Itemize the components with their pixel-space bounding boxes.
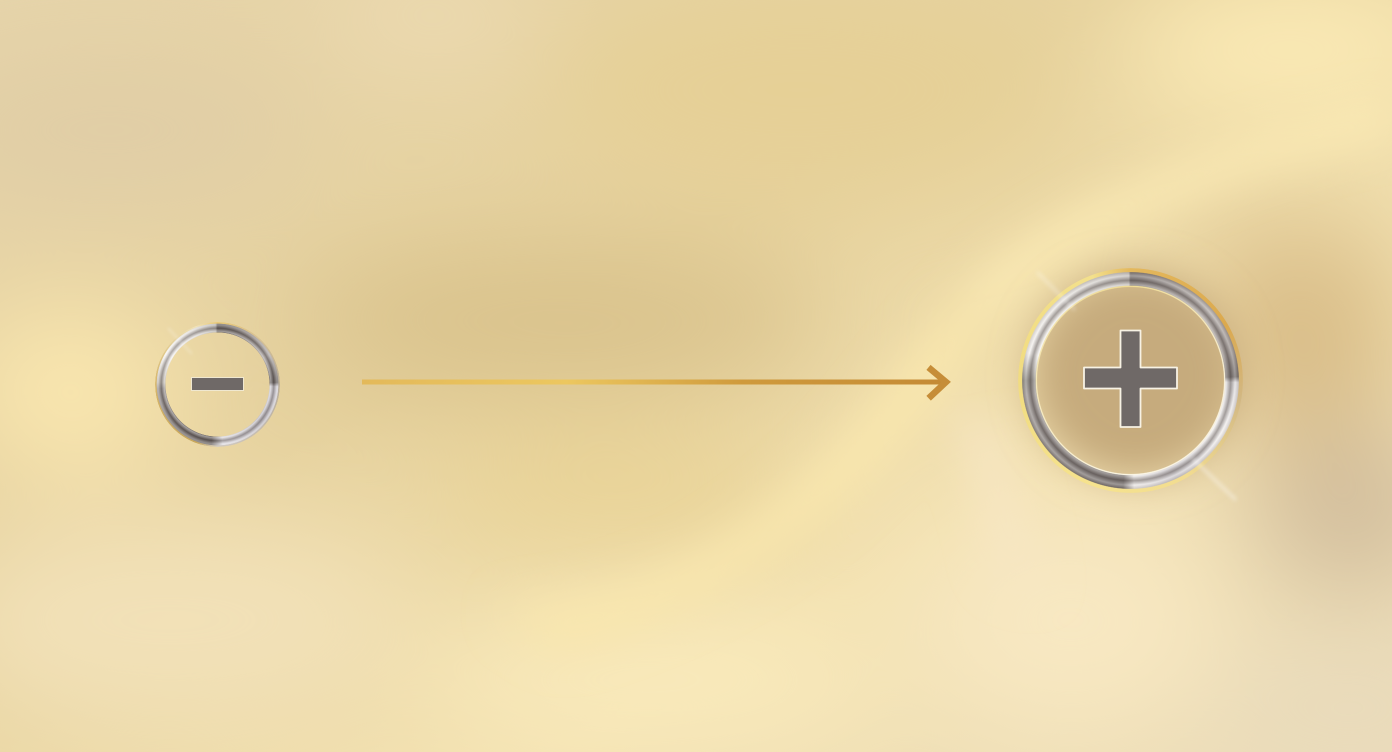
minus ring gold edge bbox=[155, 322, 280, 447]
sparkle on minus ring bbox=[168, 328, 192, 354]
plus ring silver tube bbox=[1018, 268, 1243, 493]
plus ring gold edge bbox=[1018, 268, 1243, 493]
arrow from minus to plus bbox=[362, 364, 951, 400]
sparkles on plus ring bbox=[1037, 272, 1237, 501]
icon: minus ring bbox=[155, 322, 280, 447]
minus ring silver tube bbox=[155, 322, 280, 447]
plus ring inner gold line bbox=[1036, 286, 1226, 476]
plus sign bbox=[1083, 330, 1178, 428]
minus sign bbox=[191, 377, 244, 391]
plus ring tube shading bbox=[1018, 268, 1243, 493]
minus ring tube shading bbox=[155, 322, 280, 447]
icon: plus ring bbox=[1018, 268, 1243, 493]
